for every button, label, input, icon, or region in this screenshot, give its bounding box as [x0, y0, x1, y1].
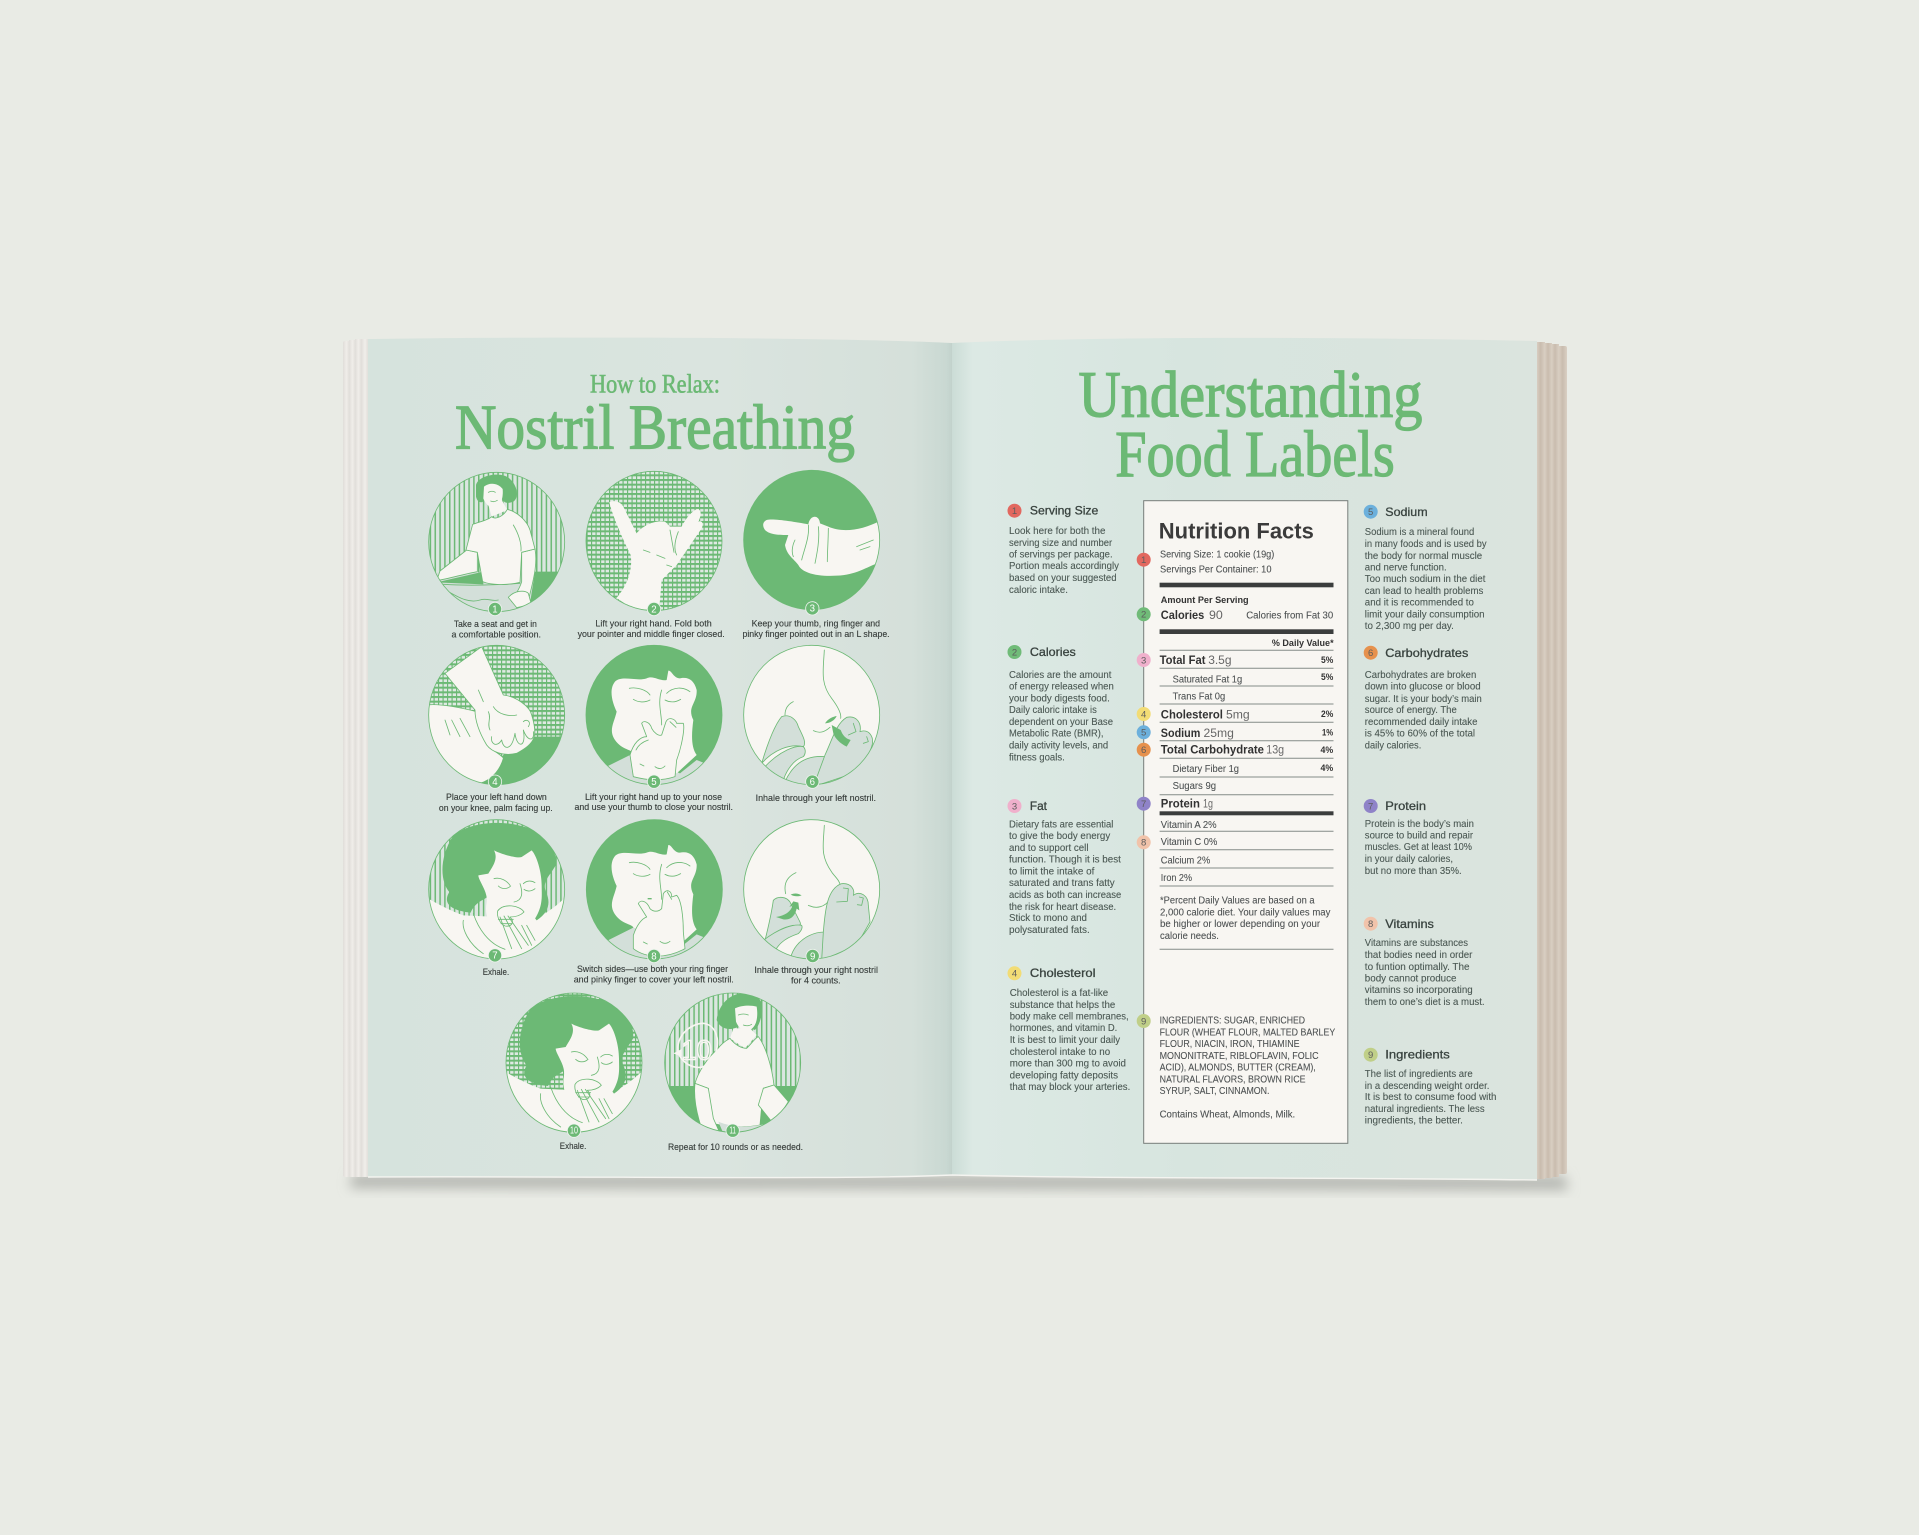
nutrition facts label: % Daily Value*	[1272, 638, 1334, 648]
step 11 illustration: 10	[681, 1034, 712, 1065]
right page stack	[1536, 342, 1567, 1179]
left page	[368, 338, 952, 1178]
nutrition facts label: 13g	[1266, 743, 1284, 757]
label callout badges: 3	[1141, 655, 1146, 666]
caption 8: and pinky finger to cover your left nostril.	[574, 974, 734, 984]
step 10 illustration	[503, 990, 645, 1137]
serving size note: 1	[1012, 506, 1017, 517]
protein note: but no more than 35%.	[1365, 866, 1462, 877]
badge 7: 7	[492, 951, 498, 962]
cholesterol note: 4	[1012, 969, 1017, 980]
caption 4	[439, 792, 553, 813]
nutrition facts label: calorie needs.	[1160, 931, 1219, 942]
nutrition facts label: 5mg	[1226, 708, 1250, 722]
badge 8	[647, 949, 661, 963]
caption 5: and use your thumb to close your nostril.	[574, 802, 733, 812]
serving size note	[1008, 504, 1119, 596]
nutrition facts label: Dietary Fiber 1g	[1173, 764, 1239, 775]
fat note: 3	[1012, 801, 1017, 812]
panel: open book	[343, 338, 1567, 1180]
badge 1	[488, 602, 502, 616]
nutrition facts label: 25mg	[1204, 726, 1234, 740]
badge 11: 11	[729, 1126, 736, 1137]
sodium note: the body for normal muscle	[1365, 551, 1483, 562]
serving size note: of servings per package.	[1009, 550, 1113, 560]
step 9 illustration	[744, 820, 880, 963]
caption 1	[452, 619, 541, 640]
nutrition facts label: Calories	[1161, 608, 1205, 622]
nutrition facts label: Serving Size: 1 cookie (19g)	[1160, 550, 1274, 561]
caption 11: Repeat for 10 rounds or as needed.	[668, 1142, 803, 1152]
panel: nostril breathing	[427, 370, 890, 1152]
title: food labels: Food Labels	[1115, 418, 1395, 491]
label callout badges: 5	[1141, 728, 1146, 739]
sodium note: and it is recommended to	[1365, 598, 1474, 608]
nutrition facts label: Protein	[1161, 797, 1200, 811]
nutrition facts label: Cholesterol	[1161, 708, 1223, 722]
nutrition facts label: Sodium	[1161, 726, 1200, 740]
nutrition facts label: *Percent Daily Values are based on a	[1160, 895, 1315, 906]
caption 7: Exhale.	[483, 967, 509, 977]
protein note: Protein	[1385, 799, 1426, 813]
caption 9	[754, 965, 878, 986]
calories note: Calories	[1030, 645, 1076, 659]
nutrition facts label: INGREDIENTS: SUGAR, ENRICHED	[1160, 1016, 1305, 1027]
sodium note: and nerve function.	[1365, 562, 1447, 574]
cholesterol note: developing fatty deposits	[1010, 1070, 1118, 1082]
label callout badges: 1	[1141, 555, 1146, 566]
ingredients note: Ingredients	[1385, 1048, 1450, 1062]
calories note: Calories are the amount	[1009, 670, 1112, 681]
label callout badges: 6	[1141, 745, 1146, 756]
step 8 illustration	[586, 820, 722, 963]
caption 8: Switch sides—use both your ring finger	[577, 964, 728, 974]
protein note	[1364, 799, 1474, 877]
nutrition facts label: 1%	[1322, 728, 1333, 738]
nutrition facts label: Servings Per Container: 10	[1160, 564, 1272, 575]
badge 8: 8	[651, 951, 657, 962]
caption 2: your pointer and middle finger closed.	[578, 629, 725, 639]
nutrition facts label: 4%	[1320, 763, 1333, 773]
badge 4	[488, 775, 502, 788]
nutrition facts label: Iron 2%	[1161, 873, 1192, 884]
badge 2	[647, 602, 661, 616]
nutrition facts label: 2%	[1321, 709, 1333, 719]
step 5 illustration	[586, 645, 722, 788]
vitamins note: vitamins so incorporating	[1365, 985, 1473, 996]
caption 5: Lift your right hand up to your nose	[585, 792, 722, 802]
step 11 illustration	[663, 992, 803, 1137]
protein note: Protein is the body’s main	[1365, 819, 1474, 830]
serving size note: caloric intake.	[1009, 585, 1068, 596]
badge 11	[726, 1124, 739, 1137]
caption 5	[574, 792, 733, 812]
nutrition facts label: Total Carbohydrate	[1161, 743, 1264, 757]
caption 3: Keep your thumb, ring finger and	[752, 618, 880, 628]
serving size note: Portion meals accordingly	[1009, 561, 1119, 572]
badge 6	[806, 775, 819, 788]
fat note	[1008, 799, 1122, 936]
step 6 illustration	[744, 645, 880, 788]
cholesterol note	[1008, 966, 1130, 1093]
vitamins note: that bodies need in order	[1365, 950, 1473, 961]
fat note: and to support cell	[1009, 843, 1088, 854]
protein note: muscles. Get at least 10%	[1365, 842, 1472, 853]
caption 2	[578, 618, 725, 639]
label callout badges: 4	[1141, 709, 1146, 720]
nutrition facts label: Vitamin A 2%	[1161, 820, 1217, 831]
vitamins note	[1364, 917, 1485, 1008]
fat note: to give the body energy	[1009, 831, 1110, 842]
nutrition facts label: Vitamin C 0%	[1161, 837, 1217, 848]
fat note: polysaturated fats.	[1009, 925, 1090, 936]
vitamins note: them to one’s diet is a must.	[1365, 997, 1485, 1008]
sodium note: can lead to health problems	[1365, 586, 1483, 597]
cholesterol note: body make cell membranes,	[1010, 1012, 1129, 1022]
fat note: function. Though it is best	[1009, 854, 1121, 866]
carbohydrates note: Carbohydrates	[1385, 646, 1468, 660]
page bottom edge highlight	[368, 1175, 1537, 1180]
carbohydrates note: Carbohydrates are broken	[1365, 670, 1476, 681]
nutrition facts label: SYRUP, SALT, CINNAMON.	[1160, 1086, 1270, 1097]
protein note: 7	[1368, 801, 1373, 812]
ingredients note: 9	[1368, 1050, 1373, 1061]
left page stack	[343, 339, 369, 1177]
badge 9	[806, 949, 819, 963]
step 4 illustration	[427, 643, 567, 788]
badge 3	[806, 602, 819, 615]
ingredients note: in a descending weight order.	[1365, 1081, 1489, 1092]
nutrition facts label	[1144, 501, 1348, 1143]
cholesterol note: Cholesterol is a fat-like	[1010, 988, 1109, 999]
sodium note: in many foods and is used by	[1365, 539, 1487, 550]
nutrition facts label: Calcium 2%	[1161, 856, 1210, 866]
nutrition facts label: be higher or lower depending on your	[1160, 919, 1321, 930]
caption 4: Place your left hand down	[446, 792, 547, 802]
nutrition facts label: Amount Per Serving	[1161, 595, 1249, 605]
carbohydrates note: daily calories.	[1365, 740, 1421, 752]
badge 9: 9	[810, 951, 815, 962]
calories note: fitness goals.	[1009, 752, 1065, 764]
serving size note: Look here for both the	[1009, 526, 1106, 537]
fat note: acids as both can increase	[1009, 890, 1122, 901]
ingredients note: It is best to consume food with	[1365, 1092, 1496, 1103]
serving size note: Serving Size	[1030, 504, 1099, 518]
badge 2: 2	[651, 604, 657, 615]
step 7 illustration	[427, 817, 567, 962]
sodium note: Sodium	[1385, 505, 1428, 519]
vitamins note: Vitamins	[1385, 917, 1434, 931]
nutrition facts label: 4%	[1320, 745, 1333, 755]
caption 6: Inhale through your left nostril.	[756, 793, 876, 803]
caption 9: for 4 counts.	[791, 976, 841, 986]
nutrition facts label: 1g	[1203, 797, 1213, 811]
label callout badges: 7	[1141, 799, 1146, 810]
calories note: Metabolic Rate (BMR),	[1009, 728, 1104, 740]
fat note: Dietary fats are essential	[1009, 820, 1113, 830]
badge 4: 4	[492, 777, 498, 788]
cholesterol note: more than 300 mg to avoid	[1010, 1058, 1126, 1070]
serving size note: serving size and number	[1009, 538, 1113, 549]
label callout badges: 8	[1141, 838, 1146, 849]
badge 10: 10	[570, 1126, 578, 1137]
nutrition facts label: FLOUR (WHEAT FLOUR, MALTED BARLEY	[1160, 1028, 1335, 1039]
carbohydrates note: down into glucose or blood	[1365, 682, 1481, 692]
nutrition facts label: Trans Fat 0g	[1173, 692, 1225, 702]
vitamins note: body cannot produce	[1365, 974, 1457, 984]
badge 1: 1	[492, 604, 498, 615]
protein note: source to build and repair	[1365, 830, 1474, 842]
caption 8	[574, 964, 734, 984]
nutrition facts label: NATURAL FLAVORS, BROWN RICE	[1160, 1074, 1306, 1085]
heading: how to relax: How to Relax:	[590, 370, 720, 399]
fat note: saturated and trans fatty	[1009, 878, 1115, 889]
sodium note: 5	[1368, 507, 1373, 518]
vitamins note: 8	[1368, 919, 1373, 930]
calories note: of energy released when	[1009, 682, 1114, 692]
sodium note: Too much sodium in the diet	[1365, 574, 1486, 585]
fat note: to limit the intake of	[1009, 866, 1095, 878]
calories note: dependent on your Base	[1009, 717, 1114, 728]
nutrition facts label: 3.5g	[1208, 653, 1232, 667]
caption 3	[742, 618, 890, 639]
badge 5: 5	[651, 777, 657, 788]
cholesterol note: Cholesterol	[1030, 966, 1096, 980]
caption 9: Inhale through your right nostril	[754, 965, 878, 975]
title: nostril breathing: Nostril Breathing	[455, 392, 855, 462]
carbohydrates note: recommended daily intake	[1365, 717, 1478, 728]
step 2 illustration	[583, 470, 727, 616]
sodium note: Sodium is a mineral found	[1365, 527, 1474, 538]
caption 3: pinky finger pointed out in an L shape.	[742, 629, 890, 639]
step 3 illustration	[744, 470, 882, 615]
caption 10: Exhale.	[560, 1141, 586, 1151]
nutrition facts label: 5%	[1321, 655, 1333, 665]
label callout badges	[1137, 553, 1151, 1028]
caption 2: Lift your right hand. Fold both	[595, 618, 712, 628]
carbohydrates note: source of energy. The	[1365, 705, 1457, 716]
calories note	[1008, 645, 1114, 764]
badge 10	[567, 1124, 581, 1137]
nutrition facts label: FLOUR, NIACIN, IRON, THIAMINE	[1160, 1039, 1300, 1050]
badge 7	[488, 949, 502, 962]
serving size note: based on your suggested	[1009, 573, 1117, 584]
badge 5	[647, 775, 661, 788]
carbohydrates note: 6	[1368, 648, 1373, 659]
fat note: Fat	[1030, 799, 1048, 813]
sodium note: limit your daily consumption	[1365, 610, 1485, 620]
protein note: in your daily calories,	[1365, 854, 1453, 865]
label callout badges: 2	[1141, 610, 1146, 621]
right page	[952, 338, 1537, 1180]
fat note: the risk for heart disease.	[1009, 902, 1116, 913]
calories note: daily activity levels, and	[1009, 740, 1108, 752]
nutrition facts label: Sugars 9g	[1173, 781, 1216, 792]
cholesterol note: cholesterol intake to no	[1010, 1047, 1111, 1058]
nutrition facts label: 90	[1209, 608, 1223, 622]
nutrition facts label: 5%	[1321, 672, 1333, 682]
ingredients note	[1364, 1048, 1496, 1126]
sodium note: to 2,300 mg per day.	[1365, 621, 1454, 632]
calories note: 2	[1012, 647, 1017, 658]
calories note: your body digests food.	[1009, 694, 1110, 704]
carbohydrates note	[1364, 646, 1482, 752]
nutrition facts label: Contains Wheat, Almonds, Milk.	[1160, 1110, 1295, 1121]
vitamins note: Vitamins are substances	[1365, 938, 1468, 949]
cholesterol note: hormones, and vitamin D.	[1010, 1023, 1117, 1034]
sodium note	[1364, 505, 1487, 632]
cholesterol note: substance that helps the	[1010, 1000, 1116, 1011]
label callout badges: 9	[1141, 1016, 1146, 1027]
nutrition facts label: 2,000 calorie diet. Your daily values may	[1160, 907, 1330, 918]
book shadow	[350, 1174, 1568, 1190]
caption 1: a comfortable position.	[452, 630, 541, 640]
carbohydrates note: sugar. It is your body’s main	[1365, 694, 1482, 705]
badge 3: 3	[810, 604, 815, 615]
panel: food labels	[1008, 358, 1496, 1143]
ingredients note: natural ingredients. The less	[1365, 1104, 1485, 1115]
ingredients note: The list of ingredients are	[1365, 1069, 1473, 1080]
badge 6: 6	[810, 777, 815, 788]
calories note: Daily caloric intake is	[1009, 705, 1097, 716]
caption 1: Take a seat and get in	[454, 619, 537, 629]
nutrition facts label: ACID), ALMONDS, BUTTER (CREAM),	[1160, 1063, 1316, 1074]
title: understanding: Understanding	[1078, 358, 1422, 432]
nutrition facts label: MONONITRATE, RIBLOFLAVIN, FOLIC	[1160, 1051, 1319, 1062]
carbohydrates note: is 45% to 60% of the total	[1365, 728, 1475, 740]
fat note: Stick to mono and	[1009, 913, 1087, 924]
nutrition facts label: Nutrition Facts	[1159, 518, 1314, 543]
step 1 illustration	[427, 470, 567, 616]
ingredients note: ingredients, the better.	[1365, 1116, 1463, 1126]
cholesterol note: that may block your arteries.	[1010, 1082, 1130, 1093]
caption 4: on your knee, palm facing up.	[439, 803, 553, 813]
nutrition facts label: Calories from Fat 30	[1246, 611, 1334, 622]
nutrition facts label: Total Fat	[1160, 653, 1206, 667]
vitamins note: to funtion optimally. The	[1365, 962, 1470, 973]
nutrition facts label: Saturated Fat 1g	[1173, 674, 1242, 686]
cholesterol note: It is best to limit your daily	[1010, 1035, 1120, 1046]
